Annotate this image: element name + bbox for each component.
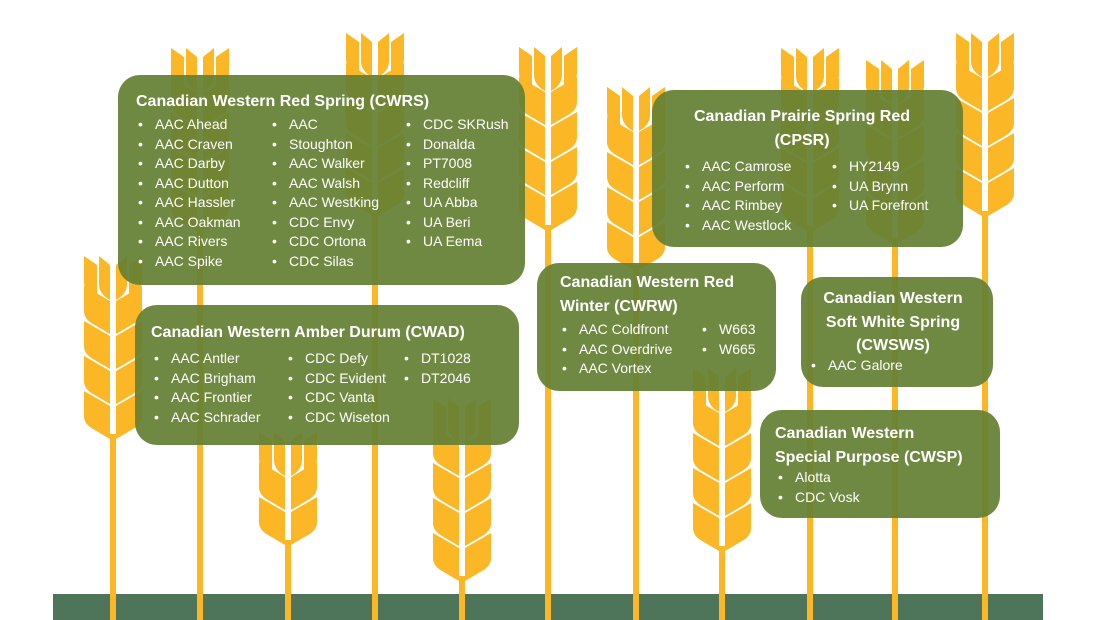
heading: CWSP: Special Purpose (CWSP) bbox=[775, 448, 963, 466]
list: CWRS col 1: AAC Rivers bbox=[155, 233, 227, 249]
list: CPSR col 2: UA Forefront bbox=[849, 197, 928, 213]
list: CWRS col 1: AAC Spike bbox=[155, 252, 223, 268]
list: CWAD col 2: CDC Wiseton bbox=[305, 408, 390, 424]
list: CWAD col 1 bbox=[154, 350, 260, 424]
text: Stoughton: Stoughton bbox=[289, 136, 353, 152]
list: CWAD col 2: CDC Vanta bbox=[305, 389, 375, 405]
wheat heads bbox=[171, 48, 229, 231]
list: CWRS col 3: UA Beri bbox=[423, 214, 470, 230]
list: CWRS col 1 bbox=[138, 116, 241, 269]
list: CWRW col 1: AAC Coldfront bbox=[579, 321, 668, 337]
list: CWRS col 2: CDC Silas bbox=[289, 252, 354, 268]
list: CWRW col 1: AAC Overdrive bbox=[579, 340, 672, 356]
list: CWRS col 3: Donalda bbox=[423, 136, 475, 152]
list: CPSR col 1: AAC Camrose bbox=[702, 158, 791, 174]
heading: CWRW bbox=[560, 274, 734, 314]
panel: CWRS bbox=[118, 75, 525, 285]
heading: CWAD: Canadian Western Amber Durum (CWAD) bbox=[151, 324, 465, 341]
heading: CPSR: (CPSR) bbox=[774, 132, 830, 148]
panel: CWSWS bbox=[801, 277, 993, 387]
list: CWAD col 1: AAC Frontier bbox=[171, 389, 252, 405]
list: CWRW col 2: W665 bbox=[719, 340, 756, 356]
list: CPSR col 1: AAC Rimbey bbox=[702, 197, 782, 213]
list: CWRS col 2: CDC Envy bbox=[289, 214, 354, 230]
list: CPSR col 2: UA Brynn bbox=[849, 178, 908, 194]
heading: CWSWS bbox=[823, 290, 963, 354]
list: CWAD col 2 bbox=[288, 350, 390, 424]
list: CWRS col 3 bbox=[406, 116, 509, 249]
list: CWAD col 3: DT2046 bbox=[421, 370, 471, 386]
heading: CPSR: Canadian Prairie Spring Red bbox=[694, 108, 910, 125]
panel: CPSR bbox=[652, 90, 963, 247]
list: CWRS col 3: UA Abba bbox=[423, 194, 478, 210]
list: CWRS col 3: PT7008 bbox=[423, 155, 472, 171]
list: CWRW col 1: AAC Vortex bbox=[579, 360, 651, 376]
list: CPSR col 1: AAC Perform bbox=[702, 178, 784, 194]
list: CWRS col 2: AAC Westking bbox=[289, 194, 379, 210]
list: CWAD col 1: AAC Antler bbox=[171, 350, 239, 366]
list: CPSR col 2 bbox=[832, 158, 928, 213]
heading: CWSP: Canadian Western bbox=[775, 425, 914, 442]
list: CWAD col 2: CDC Defy bbox=[305, 350, 368, 366]
list: CWRS col 2: CDC Ortona bbox=[289, 233, 366, 249]
list: CWRS col 1: AAC Hassler bbox=[155, 194, 235, 210]
list: CWRS col 3: UA Eema bbox=[423, 233, 482, 249]
list: CWAD col 1: AAC Schrader bbox=[171, 408, 260, 424]
list: CWRS col 2: AAC bbox=[289, 116, 318, 132]
list: CWRS col 2: AAC Walker bbox=[289, 155, 365, 171]
heading: CWSP bbox=[775, 425, 963, 466]
heading: CWRW: Canadian Western Red bbox=[560, 274, 734, 291]
list: CWRW col 2 bbox=[702, 321, 756, 356]
heading: CWRW: Winter (CWRW) bbox=[560, 298, 678, 314]
list: CWSP bbox=[778, 469, 860, 504]
list: CWRS col 3: Redcliff bbox=[423, 174, 469, 190]
list: CPSR col 1 bbox=[686, 158, 792, 232]
list: CPSR col 1: AAC Westlock bbox=[702, 216, 791, 232]
list: CWRS col 1: AAC Oakman bbox=[155, 214, 241, 230]
list: CWSP: Alotta bbox=[795, 469, 831, 485]
list: CWRS col 1: AAC Ahead bbox=[155, 116, 227, 132]
list: CWRW col 2: W663 bbox=[719, 321, 756, 337]
panel: CWSP bbox=[760, 410, 1000, 518]
list: CWRW col 1 bbox=[562, 321, 672, 376]
list: CWRS col 1: AAC Craven bbox=[155, 136, 233, 152]
list: CWRS col 3: CDC SKRush bbox=[423, 116, 509, 132]
list: CPSR col 2: HY2149 bbox=[849, 158, 900, 174]
ground band bbox=[53, 594, 1043, 620]
heading: CWSWS: Soft White Spring bbox=[826, 314, 960, 330]
list: CWAD col 1: AAC Brigham bbox=[171, 370, 256, 386]
list: CWAD col 3 bbox=[404, 350, 471, 386]
list: CWSWS: AAC Galore bbox=[828, 357, 903, 373]
heading: CPSR bbox=[694, 108, 910, 148]
list: CWAD col 3: DT1028 bbox=[421, 350, 471, 366]
list: CWRS col 2: AAC Walsh bbox=[289, 174, 360, 190]
panel: CWRW bbox=[537, 263, 776, 391]
wheat stalks bbox=[110, 211, 988, 620]
list: CWSP: CDC Vosk bbox=[795, 488, 860, 504]
list: CWRS col 1: AAC Dutton bbox=[155, 174, 229, 190]
heading: CWSWS: Canadian Western bbox=[823, 290, 963, 307]
list: CWRS col 2 bbox=[272, 116, 379, 268]
list: CWAD col 2: CDC Evident bbox=[305, 370, 386, 386]
list: CWRS col 1: AAC Darby bbox=[155, 155, 225, 171]
heading: CWRS: Canadian Western Red Spring (CWRS) bbox=[136, 93, 429, 110]
panel: CWAD bbox=[135, 305, 519, 445]
heading: CWSWS: (CWSWS) bbox=[856, 337, 930, 354]
